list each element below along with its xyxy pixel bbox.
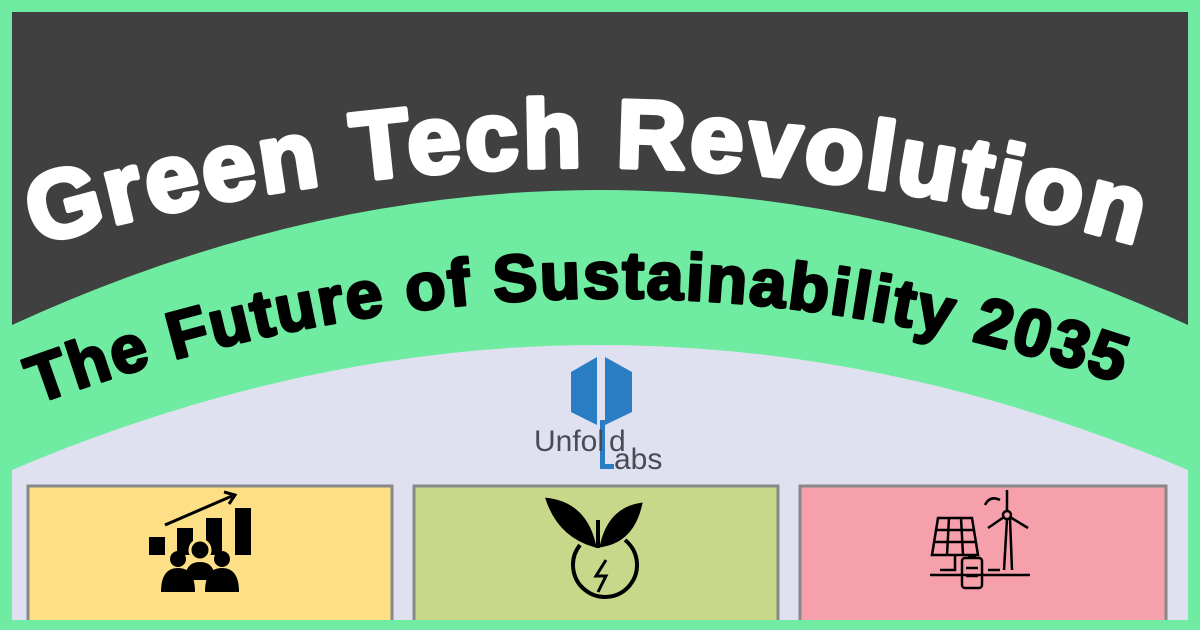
title: Green Tech Revolution: [27, 95, 1143, 246]
card: growth: [28, 486, 392, 630]
icon: leaf and bolt: [548, 500, 640, 597]
bottom border: [0, 620, 1200, 630]
subtitle: The Future of Sustainability 2035: [20, 250, 1130, 400]
logo: Unfold Labs: abs: [614, 443, 662, 476]
logo: Unfold Labs: [534, 357, 662, 476]
icon: chart with people: [149, 492, 251, 592]
card: energy: [414, 486, 778, 630]
logo: Unfold Labs: d: [609, 425, 626, 458]
logo: Unfold Labs: Unfol: [534, 425, 604, 458]
icon: solar wind battery: [930, 490, 1030, 588]
card: renewables: [800, 486, 1166, 630]
